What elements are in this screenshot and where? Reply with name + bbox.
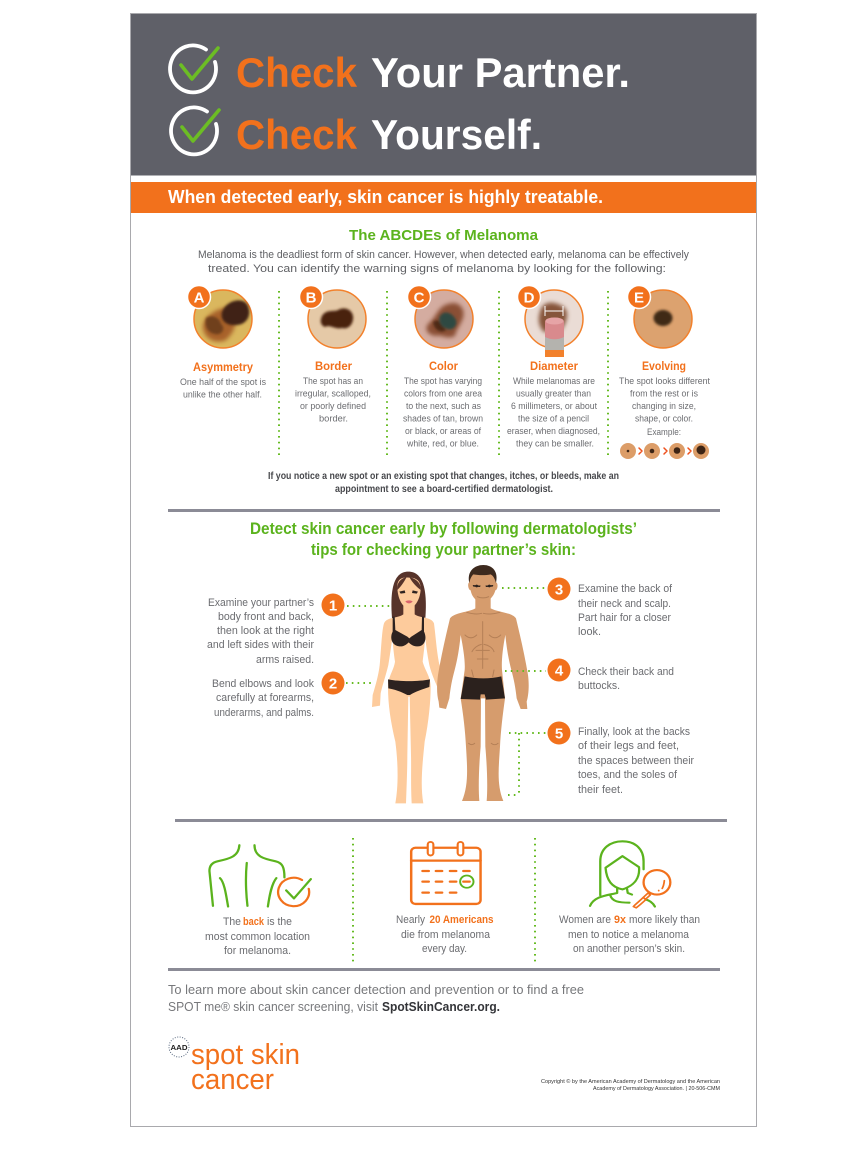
title line 1: Your Partner. xyxy=(371,49,630,96)
callout: see a dermatologist xyxy=(268,471,619,495)
logo wordmark xyxy=(191,1039,300,1096)
title: Color xyxy=(429,359,458,373)
tip 5 text xyxy=(578,726,694,796)
stat: back xyxy=(205,845,311,957)
badge 3 xyxy=(548,578,570,600)
stat text xyxy=(559,914,700,955)
description: border. xyxy=(319,414,348,424)
photo: evolving mole xyxy=(634,290,692,348)
tip 4 text: buttocks. xyxy=(578,680,620,692)
description: One half of the spot is xyxy=(180,377,266,388)
tip 2 text xyxy=(212,678,315,719)
panel: Border xyxy=(295,286,371,424)
copyright xyxy=(541,1078,720,1092)
intro text xyxy=(198,249,689,275)
description xyxy=(619,376,710,438)
description: they can be smaller. xyxy=(516,438,594,450)
title line 1 xyxy=(236,49,630,96)
tip 1 text xyxy=(207,597,314,666)
stat text: is the xyxy=(267,916,292,928)
badge 5: 5 xyxy=(555,726,563,742)
icon: calendar xyxy=(411,842,481,904)
header banner xyxy=(131,14,756,176)
heading: partner tips: Detect skin cancer early by following dermatologists’ xyxy=(250,520,637,538)
footer call to action: To learn more about skin cancer detection and prevention or to find a free xyxy=(168,983,584,997)
description xyxy=(180,377,266,400)
title: Diameter xyxy=(530,359,578,373)
stat: deaths per day xyxy=(396,842,494,955)
description: While melanomas are xyxy=(513,376,595,387)
logo: AAD seal: AAD xyxy=(170,1043,188,1052)
tip 2 text: carefully at forearms, xyxy=(216,692,314,704)
tip 3 text: Part hair for a closer xyxy=(578,612,671,624)
tip 3 xyxy=(502,578,672,638)
figure: man xyxy=(437,565,529,801)
icon: back with check xyxy=(209,845,311,907)
tip 3 text: Examine the back of xyxy=(578,583,672,595)
icon: woman with magnifying glass xyxy=(590,841,670,908)
stat text: on another person’s skin. xyxy=(573,943,685,955)
stat: women more likely xyxy=(559,841,700,955)
description: irregular, scalloped, xyxy=(295,388,371,400)
title: Evolving xyxy=(642,359,686,373)
title line 2 xyxy=(236,111,542,158)
title line 2: Yourself. xyxy=(371,111,542,158)
photo: varied color mole xyxy=(415,290,473,348)
stat text: more likely than xyxy=(629,914,700,926)
footer call to action: SpotSkinCancer.org. xyxy=(382,1000,500,1014)
description: white, red, or blue. xyxy=(406,438,479,450)
stat text: 20 Americans xyxy=(430,914,494,926)
panel: Evolving xyxy=(619,286,710,459)
copyright: Copyright © by the American Academy of Dermatology and the American xyxy=(541,1078,720,1085)
tip 3 text xyxy=(578,583,672,638)
description: from the rest or is xyxy=(630,388,698,400)
tip 1 text: and left sides with their xyxy=(207,639,314,651)
description: changing in size, xyxy=(632,401,696,412)
description: unlike the other half. xyxy=(183,390,262,400)
tip 4 xyxy=(505,658,674,692)
heading: partner tips: tips for checking your partner’s skin: xyxy=(311,541,576,559)
tip 5 text: of their legs and feet, xyxy=(578,740,679,752)
tip 5 text: the spaces between their xyxy=(578,755,694,767)
illustration: woman and man xyxy=(372,565,529,803)
heading: partner tips xyxy=(250,520,637,559)
tip 2 xyxy=(212,672,373,719)
description: or poorly defined xyxy=(300,401,366,412)
stat text: Nearly xyxy=(396,914,426,926)
description: The spot has varying xyxy=(404,376,482,387)
tip 1 text: arms raised. xyxy=(256,654,314,666)
description: The spot has an xyxy=(303,376,363,387)
icon: check mark 2 xyxy=(171,107,219,154)
stat text: 9x xyxy=(614,914,626,926)
badge 1 xyxy=(322,594,344,616)
orange tagline band: When detected early, skin cancer is highly treatable. xyxy=(168,187,603,207)
tip 5 text: toes, and the soles of xyxy=(578,769,677,781)
stat text: men to notice a melanoma xyxy=(568,929,689,941)
logo wordmark: spot skin xyxy=(191,1039,300,1071)
tip 5 xyxy=(508,722,694,796)
badge D: D xyxy=(524,290,535,306)
badge D xyxy=(518,286,540,308)
tip 4 text xyxy=(578,666,674,692)
panel: Diameter xyxy=(507,286,600,450)
panel: Asymmetry xyxy=(180,286,266,400)
description: or black, or areas of xyxy=(405,426,481,437)
description: The spot looks different xyxy=(619,376,710,387)
tip 2 text: Bend elbows and look xyxy=(212,678,315,690)
description: eraser, when diagnosed, xyxy=(507,426,600,437)
description xyxy=(507,376,600,450)
photo: asymmetric mole xyxy=(194,290,252,348)
stat text: The xyxy=(223,916,241,928)
evolution example sequence xyxy=(620,443,709,459)
badge B: B xyxy=(306,290,317,306)
photo: mole beside pencil eraser xyxy=(525,290,583,357)
logo: spot skin cancer xyxy=(169,1037,300,1096)
description: shades of tan, brown xyxy=(403,414,483,424)
badge A: A xyxy=(194,290,205,306)
description: usually greater than xyxy=(516,388,591,400)
badge 4: 4 xyxy=(555,662,564,680)
logo wordmark: cancer xyxy=(191,1064,274,1096)
stat text: every day. xyxy=(422,943,467,955)
tip 1 text: body front and back, xyxy=(218,611,314,623)
description: the size of a pencil xyxy=(518,414,589,424)
tip 3 text: look. xyxy=(578,626,601,638)
badge E xyxy=(628,286,650,308)
intro text: treated. You can identify the warning signs of melanoma by looking for the following: xyxy=(208,263,666,275)
tip 1 text: then look at the right xyxy=(217,625,314,637)
callout: see a dermatologist: If you notice a new spot or an existing spot that changes, itches, or bleeds, make an xyxy=(268,471,619,482)
copyright: Academy of Dermatology Association. | 20-506-CMM xyxy=(593,1086,720,1092)
callout: see a dermatologist: appointment to see a board-certified dermatologist. xyxy=(335,484,553,495)
badge C: C xyxy=(414,290,425,306)
badge 4 xyxy=(548,658,570,682)
title: Asymmetry xyxy=(193,360,253,374)
stat text xyxy=(205,916,310,957)
stat text xyxy=(396,914,494,955)
description xyxy=(295,376,371,424)
badge 2 xyxy=(322,672,344,694)
heading: ABCDEs: The ABCDEs of Melanoma xyxy=(349,227,539,244)
title line 1: Check xyxy=(236,49,358,96)
intro text: Melanoma is the deadliest form of skin cancer. However, when detected early, melanoma can be effectively xyxy=(198,249,689,261)
stat text: die from melanoma xyxy=(401,929,490,941)
badge C xyxy=(408,286,430,308)
tip 5 text: Finally, look at the backs xyxy=(578,726,690,738)
stat text: most common location xyxy=(205,931,310,943)
badge 1: 1 xyxy=(329,598,337,614)
badge 2: 2 xyxy=(329,676,337,692)
description xyxy=(403,376,483,450)
stat text: back xyxy=(243,916,264,928)
description: to the next, such as xyxy=(406,401,481,412)
title: Border xyxy=(315,359,352,373)
tip 2 text: underarms, and palms. xyxy=(214,707,314,719)
badge E: E xyxy=(634,290,644,306)
tip 3 text: their neck and scalp. xyxy=(578,598,671,610)
description: Example: xyxy=(647,427,681,438)
stat text: Women are xyxy=(559,914,611,926)
page frame xyxy=(130,14,756,1126)
tip 5 text: their feet. xyxy=(578,784,623,796)
figure: woman xyxy=(372,572,441,803)
description: shape, or color. xyxy=(635,414,693,424)
badge 5 xyxy=(548,722,570,744)
title line 2: Check xyxy=(236,111,358,158)
panel: Color xyxy=(403,286,483,450)
footer call to action xyxy=(168,983,584,1014)
orange tagline band xyxy=(131,182,756,213)
stat text: for melanoma. xyxy=(224,945,291,957)
footer call to action: SPOT me® skin cancer screening, visit xyxy=(168,1000,379,1014)
icon: check mark 1 xyxy=(170,45,218,92)
tip 1 text: Examine your partner’s xyxy=(208,597,314,609)
description: colors from one area xyxy=(404,388,483,400)
badge 3: 3 xyxy=(555,582,563,598)
photo: irregular border mole xyxy=(308,290,366,348)
description: 6 millimeters, or about xyxy=(511,401,597,412)
tip 4 text: Check their back and xyxy=(578,666,674,678)
tip 1 xyxy=(207,594,390,666)
